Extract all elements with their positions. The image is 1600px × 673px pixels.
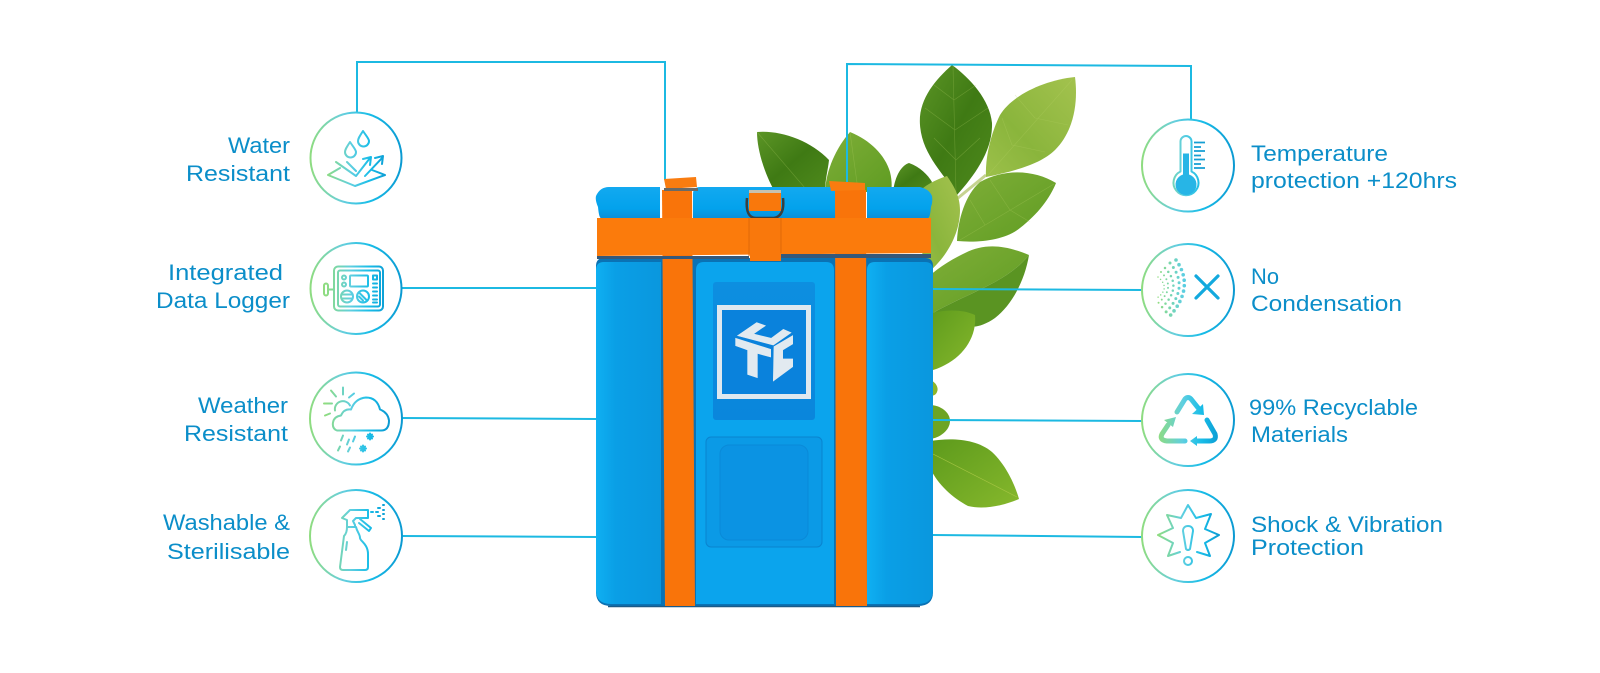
feature: shock and vibration protection: [1142, 490, 1443, 582]
label: Temperature: [1251, 141, 1388, 166]
logo: [720, 308, 808, 396]
label: No: [1251, 264, 1279, 289]
feature: integrated data logger: [156, 243, 402, 334]
label: Shock & Vibration: [1251, 512, 1443, 537]
label: Protection: [1251, 535, 1364, 560]
label: Sterilisable: [167, 539, 290, 564]
box body: [596, 258, 933, 606]
label: [1251, 141, 1457, 193]
label: [1251, 512, 1443, 560]
icon: recycling triangle: [1142, 374, 1234, 466]
label: Water: [228, 133, 291, 158]
label: [186, 133, 291, 186]
label: [184, 393, 289, 446]
icon: water droplets over layers: [310, 112, 402, 204]
strap clips: [664, 177, 697, 189]
label: Integrated: [168, 260, 283, 285]
icon: data logger device: [310, 243, 402, 334]
icon: burst with exclamation mark: [1142, 490, 1234, 582]
label: [156, 260, 291, 313]
product: blue insulated box with orange straps: [596, 177, 933, 606]
horizontal strap: [597, 218, 931, 256]
D-ring buckle: [747, 198, 783, 218]
label: Condensation: [1251, 291, 1402, 316]
label: 99% Recyclable: [1249, 395, 1418, 420]
feature: weather resistant: [184, 372, 402, 464]
label: Weather: [198, 393, 289, 418]
logo recess: [713, 282, 815, 420]
lower recess: [706, 437, 822, 547]
label: Resistant: [184, 421, 289, 446]
lid: [596, 187, 660, 218]
feature: recyclable materials: [1142, 374, 1418, 466]
label: [1251, 264, 1402, 316]
label: Washable &: [163, 510, 290, 535]
label: [163, 510, 290, 564]
feature: temperature protection: [1142, 120, 1457, 212]
label: Data Logger: [156, 288, 291, 313]
icon: thermometer: [1142, 120, 1234, 212]
feature: no condensation: [1142, 244, 1402, 336]
connector lines: [357, 62, 1191, 537]
icon: dots and cross: [1142, 244, 1234, 336]
icon: spray bottle: [310, 490, 402, 582]
feature: washable and sterilisable: [163, 490, 402, 582]
feature: water resistant: [186, 112, 402, 204]
icon: sun, cloud, rain and snow: [310, 372, 402, 464]
label: Materials: [1251, 422, 1348, 447]
label: Resistant: [186, 161, 291, 186]
center panel: [696, 262, 834, 604]
vertical straps: [662, 190, 695, 606]
leaves behind the box: [757, 65, 1076, 507]
label: protection +120hrs: [1251, 168, 1457, 193]
label: [1249, 395, 1418, 447]
